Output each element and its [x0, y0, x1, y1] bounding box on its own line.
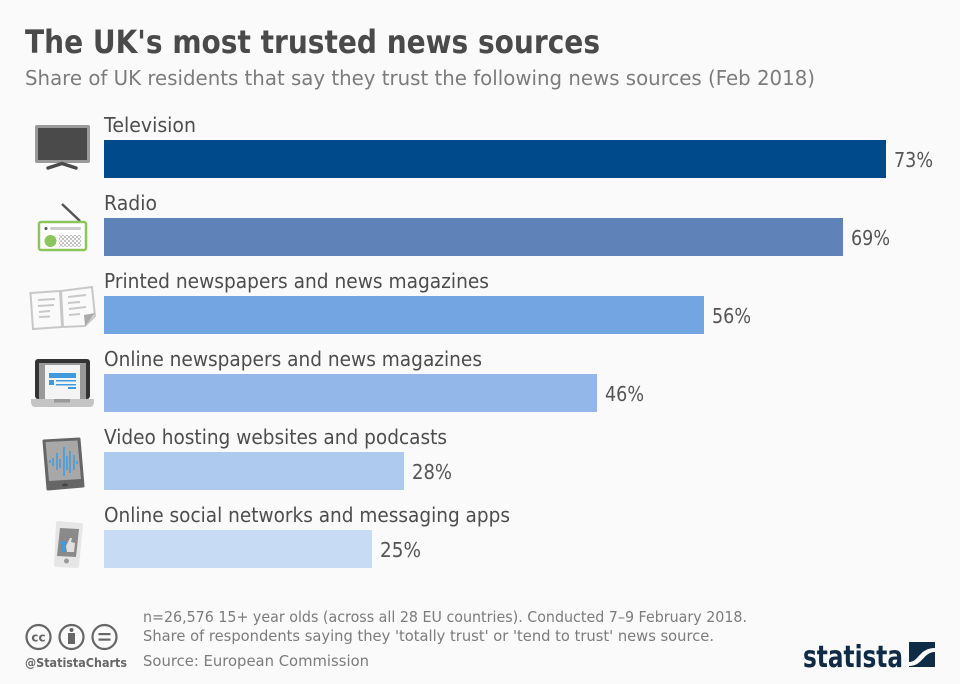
icon: smartphone — [56, 523, 81, 566]
bar row: Radio: 69% — [851, 226, 890, 250]
bar row: Printed newspapers: Printed newspapers and news magazines — [104, 269, 489, 293]
footnote text — [143, 608, 747, 670]
statista logo: statista — [803, 640, 903, 675]
bar row: Television: 73% — [894, 148, 933, 172]
bar row: Video hosting — [104, 425, 452, 490]
title: The UK's most trusted news sources — [25, 23, 600, 61]
bar row: Social networks: Online social networks and messaging apps — [104, 503, 510, 527]
bar row: Online newspapers — [104, 347, 644, 412]
footnote text: n=26,576 15+ year olds (across all 28 EU countries). Conducted 7–9 February 2018. — [143, 608, 747, 626]
footnote text: Source: European Commission — [143, 652, 369, 670]
icon: creative commons licence — [26, 625, 116, 649]
icon: radio — [39, 204, 86, 250]
icon: television — [35, 125, 90, 168]
credit handle: @StatistaCharts — [25, 656, 127, 670]
bar row: Radio — [104, 191, 890, 256]
bar row: Social networks: 25% — [380, 538, 421, 562]
bar row: Printed newspapers: 56% — [712, 304, 751, 328]
bar row: Video hosting: 28% — [412, 460, 452, 484]
bar row: Online newspapers: 46% — [605, 382, 644, 406]
bar row: Printed newspapers — [104, 269, 751, 334]
bar row: Video hosting: Video hosting websites and podcasts — [104, 425, 447, 449]
subtitle: Share of UK residents that say they trust the following news sources (Feb 2018) — [25, 66, 815, 90]
footnote text: Share of respondents saying they 'totally trust' or 'tend to trust' news source. — [143, 627, 714, 645]
bar row: Television: Television — [103, 113, 196, 137]
bar row: Television — [103, 113, 933, 178]
bar row: Radio: Radio — [104, 191, 157, 215]
icon: tablet — [44, 439, 83, 489]
bar row: Online newspapers: Online newspapers and news magazines — [104, 347, 482, 371]
icon: open newspaper — [30, 287, 95, 329]
bar row: Social networks — [104, 503, 510, 568]
icon: laptop — [31, 359, 94, 407]
icon: creative commons licence: cc — [31, 630, 46, 644]
